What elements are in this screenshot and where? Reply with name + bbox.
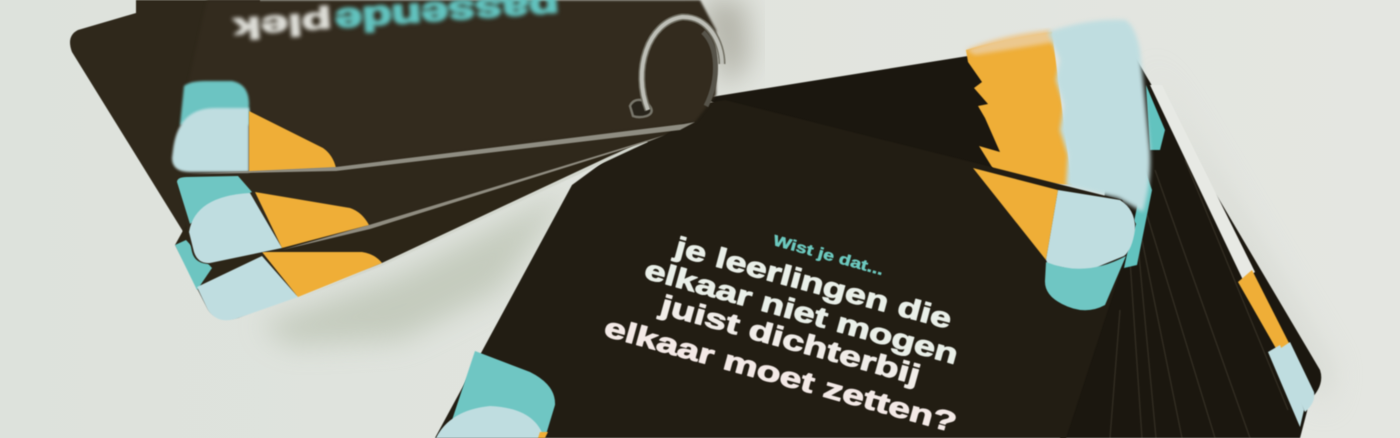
corner shapes bottom left <box>436 351 555 438</box>
panel: right card deck <box>435 20 1321 438</box>
metal ring <box>630 17 722 117</box>
panel: left card deck <box>70 0 722 320</box>
card text: Wist je dat... <box>771 232 885 279</box>
card text <box>601 231 962 438</box>
teal edge strip <box>1124 85 1165 268</box>
card text: elkaar niet mogen <box>641 254 962 370</box>
card text: juist dichterbij <box>656 289 924 391</box>
second card <box>177 110 700 264</box>
stacked orange corners <box>966 32 1072 185</box>
corner shapes top right <box>973 168 1135 310</box>
fanned cards at right <box>1060 40 1321 438</box>
stacked cards behind main card <box>705 56 1030 190</box>
stacked light-blue corners <box>1048 20 1150 212</box>
main card <box>435 100 1136 438</box>
third card <box>175 110 700 320</box>
card text: je leerlingen die <box>671 231 955 335</box>
upside-down card title: plek <box>232 5 333 45</box>
table shadows <box>260 0 1335 410</box>
top card <box>172 0 716 174</box>
upside-down card title <box>232 0 560 45</box>
back cards <box>70 0 260 246</box>
card text: elkaar moet zetten? <box>601 311 960 438</box>
